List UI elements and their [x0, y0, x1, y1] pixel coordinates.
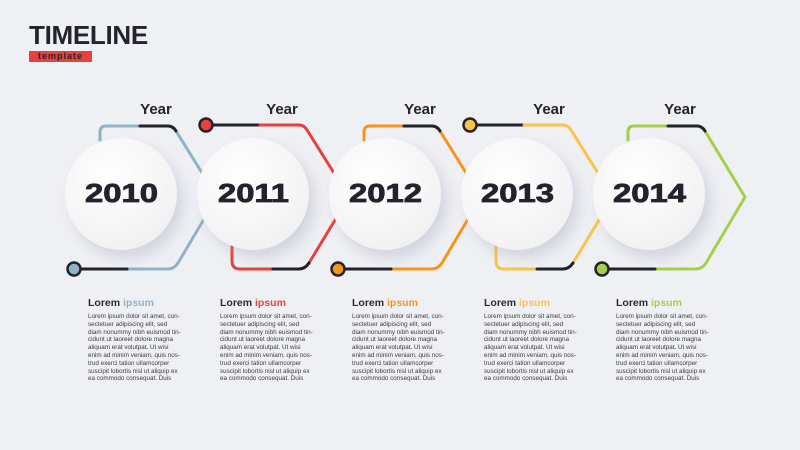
text block 2013: trud exerci tation ullamcorper	[484, 360, 565, 367]
connector 2013	[476, 125, 613, 269]
text block 2013: Lorem ipsum dolor sit amet, con-	[484, 313, 576, 320]
text block 2011: trud exerci tation ullamcorper	[220, 360, 301, 367]
text block 2014: suscipit lobortis nisl ut aliquip ex	[616, 368, 706, 375]
text block 2010: aliquam erat volutpat. Ut wisi	[88, 344, 168, 351]
text block 2012: aliquam erat volutpat. Ut wisi	[352, 344, 432, 351]
text block 2013: Lorem ipsum	[484, 297, 550, 309]
title: TIMELINE	[29, 20, 148, 50]
circle 2014: 2014	[613, 178, 687, 208]
text block 2012: ea commodo consequat. Duis	[352, 375, 435, 382]
text block 2014: Lorem ipsum	[616, 297, 682, 309]
circle 2012: 2012	[349, 178, 422, 208]
text block 2014: sectetuer adipiscing elit, sed	[616, 321, 695, 328]
text block 2010: sectetuer adipiscing elit, sed	[88, 321, 167, 328]
connector 2014	[608, 126, 745, 269]
dot 2011	[200, 118, 212, 132]
connector 2011	[212, 125, 349, 269]
text block 2012: sectetuer adipiscing elit, sed	[352, 321, 431, 328]
dot 2010	[68, 262, 80, 276]
year label 5: Year	[664, 101, 696, 118]
text block 2012	[352, 297, 445, 382]
text block 2014: ea commodo consequat. Duis	[616, 375, 699, 382]
text block 2011: cidunt ut laoreet dolore magna	[220, 336, 305, 343]
circle 2014	[593, 138, 705, 250]
text block 2013: aliquam erat volutpat. Ut wisi	[484, 344, 564, 351]
connector 2012	[344, 126, 481, 269]
year label 4: Year	[533, 101, 565, 118]
text block 2010: enim ad minim veniam, quis nos-	[88, 352, 180, 359]
dot 2012	[332, 262, 344, 276]
text block 2012: enim ad minim veniam, quis nos-	[352, 352, 444, 359]
text block 2011: aliquam erat volutpat. Ut wisi	[220, 344, 300, 351]
subtitle badge	[29, 51, 92, 62]
text block 2010	[88, 297, 181, 382]
text block 2011: enim ad minim veniam, quis nos-	[220, 352, 312, 359]
text block 2012: suscipit lobortis nisl ut aliquip ex	[352, 368, 442, 375]
circle 2012	[329, 138, 441, 250]
text block 2011: Lorem ipsum	[220, 297, 286, 309]
text block 2012: Lorem ipsum dolor sit amet, con-	[352, 313, 444, 320]
text block 2013: ea commodo consequat. Duis	[484, 375, 567, 382]
text block 2013	[484, 297, 577, 382]
text block 2013: suscipit lobortis nisl ut aliquip ex	[484, 368, 574, 375]
text block 2011: Lorem ipsum dolor sit amet, con-	[220, 313, 312, 320]
text block 2014: aliquam erat volutpat. Ut wisi	[616, 344, 696, 351]
text block 2012: Lorem ipsum	[352, 297, 418, 309]
text block 2012: diam nonummy nibh euismod tin-	[352, 329, 445, 336]
text block 2010: ea commodo consequat. Duis	[88, 375, 171, 382]
connector 2010	[80, 126, 217, 269]
text block 2014: Lorem ipsum dolor sit amet, con-	[616, 313, 708, 320]
text block 2013: enim ad minim veniam, quis nos-	[484, 352, 576, 359]
text block 2011: suscipit lobortis nisl ut aliquip ex	[220, 368, 310, 375]
text block 2014: trud exerci tation ullamcorper	[616, 360, 697, 367]
text block 2010: diam nonummy nibh euismod tin-	[88, 329, 181, 336]
text block 2010: Lorem ipsum	[88, 297, 154, 309]
circle 2010	[65, 138, 177, 250]
year label 2: Year	[266, 101, 298, 118]
dot 2014	[596, 262, 608, 276]
text block 2011: diam nonummy nibh euismod tin-	[220, 329, 313, 336]
text block 2010: cidunt ut laoreet dolore magna	[88, 336, 173, 343]
text block 2012: trud exerci tation ullamcorper	[352, 360, 433, 367]
text block 2010: suscipit lobortis nisl ut aliquip ex	[88, 368, 178, 375]
circle 2013: 2013	[481, 178, 554, 208]
year label 3: Year	[404, 101, 436, 118]
text block 2014	[616, 297, 709, 382]
text block 2012: cidunt ut laoreet dolore magna	[352, 336, 437, 343]
text block 2014: diam nonummy nibh euismod tin-	[616, 329, 709, 336]
circle 2010: 2010	[85, 178, 158, 208]
text block 2011: sectetuer adipiscing elit, sed	[220, 321, 299, 328]
circle 2011	[197, 138, 309, 250]
circle 2013	[461, 138, 573, 250]
text block 2013: cidunt ut laoreet dolore magna	[484, 336, 569, 343]
text block 2014: cidunt ut laoreet dolore magna	[616, 336, 701, 343]
text block 2013: diam nonummy nibh euismod tin-	[484, 329, 577, 336]
subtitle badge: template	[38, 51, 83, 61]
circle 2011: 2011	[218, 178, 289, 208]
text block 2013: sectetuer adipiscing elit, sed	[484, 321, 563, 328]
text block 2010: Lorem ipsum dolor sit amet, con-	[88, 313, 180, 320]
year label 1: Year	[140, 101, 172, 118]
text block 2011	[220, 297, 313, 382]
text block 2014: enim ad minim veniam, quis nos-	[616, 352, 708, 359]
dot 2013	[464, 118, 476, 132]
text block 2010: trud exerci tation ullamcorper	[88, 360, 169, 367]
text block 2011: ea commodo consequat. Duis	[220, 375, 303, 382]
